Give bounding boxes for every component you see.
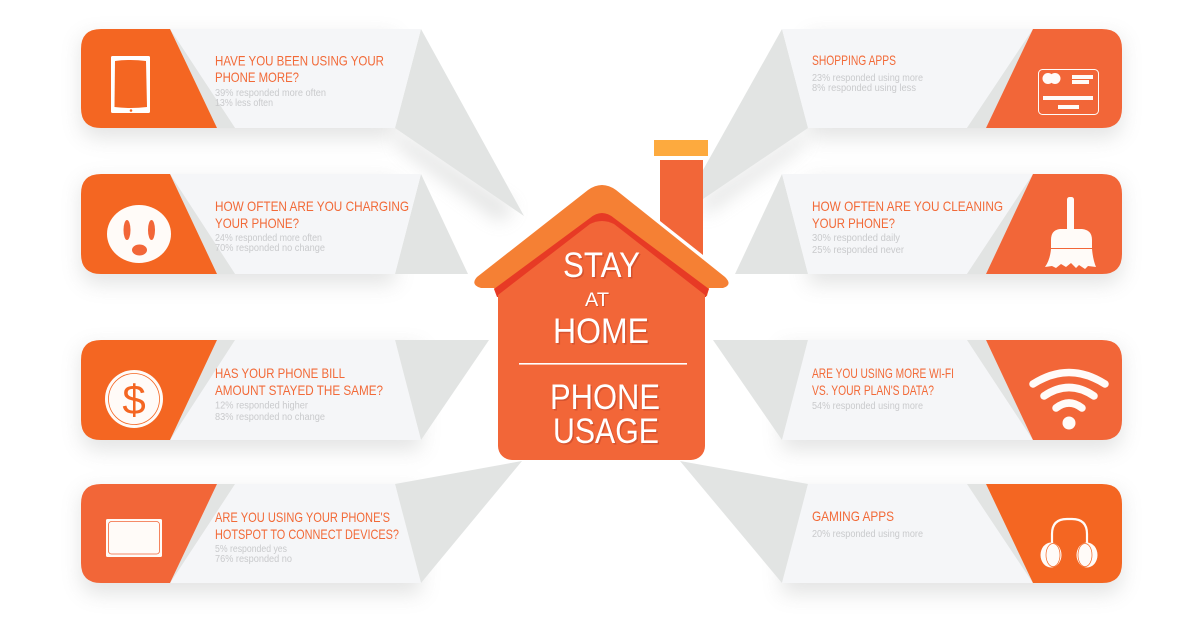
text: hotspot: 5% responded yes (215, 544, 287, 555)
text: using phone more: HAVE YOU BEEN USING YOUR (215, 52, 384, 68)
text: phone bill: 12% responded higher (215, 400, 309, 412)
house title: STAY (563, 246, 640, 285)
house title: PHONE (550, 378, 660, 417)
text: cleaning phone: HOW OFTEN ARE YOU CLEANING (812, 198, 1003, 214)
text: shopping apps: 23% responded using more (812, 73, 923, 84)
house title: HOME (553, 312, 649, 351)
text: gaming apps: 20% responded using more (812, 529, 923, 540)
text: shopping apps: 8% responded using less (812, 83, 916, 94)
text: cleaning phone: 30% responded daily (812, 233, 900, 244)
house (474, 140, 729, 460)
text: hotspot: 76% responded no (215, 554, 292, 565)
house title: USAGE (553, 412, 659, 451)
chimney (654, 140, 708, 255)
icon: wifi (1033, 372, 1105, 430)
icon: broom (1045, 197, 1096, 269)
text: cleaning phone: 25% responded never (812, 245, 905, 256)
text: wi-fi: ARE YOU USING MORE WI-FI (812, 365, 954, 381)
panel: hotspot (81, 461, 522, 583)
house title: STAY (564, 248, 642, 286)
text: charging phone: 24% responded more often (215, 233, 322, 244)
text: shopping apps (812, 52, 923, 94)
text: gaming apps (812, 508, 923, 540)
icon: power outlet (107, 205, 171, 263)
text: using phone more (215, 52, 384, 109)
house title: PHONE (552, 380, 662, 418)
icon: headphones (1040, 519, 1098, 568)
text: wi-fi (812, 365, 954, 412)
text: gaming apps: GAMING APPS (812, 508, 894, 524)
text: cleaning phone (812, 198, 1003, 256)
panel: charging phone (81, 174, 468, 274)
house title (519, 246, 687, 452)
panel: gaming apps (680, 461, 1122, 583)
text: phone bill (215, 365, 383, 423)
house title: USAGE (554, 414, 660, 452)
roof (474, 185, 729, 297)
panel: cleaning phone (735, 174, 1122, 274)
text: wi-fi: VS. YOUR PLAN'S DATA? (812, 382, 934, 398)
house title: HOME (554, 314, 650, 352)
panel: shopping apps (703, 29, 1122, 199)
text: wi-fi: 54% responded using more (812, 401, 923, 412)
text: hotspot: ARE YOU USING YOUR PHONE'S (215, 509, 390, 525)
card shadows (81, 36, 1122, 594)
text: phone bill: AMOUNT STAYED THE SAME? (215, 382, 383, 398)
panel: wi-fi (713, 340, 1122, 440)
panel: phone bill (81, 340, 489, 440)
text: charging phone (215, 198, 409, 254)
text: using phone more: PHONE MORE? (215, 69, 299, 85)
text: shopping apps: SHOPPING APPS (812, 52, 896, 68)
text: hotspot (215, 509, 399, 565)
icon: tablet (111, 56, 150, 113)
text: phone bill: HAS YOUR PHONE BILL (215, 365, 345, 381)
text: charging phone: HOW OFTEN ARE YOU CHARGING (215, 198, 409, 214)
house title: AT (585, 290, 609, 311)
house body (498, 221, 705, 460)
icon: dollar coin (105, 370, 163, 428)
house title: AT (586, 291, 610, 312)
text: using phone more: 39% responded more often (215, 88, 326, 99)
icon: credit card (1038, 70, 1098, 114)
icon: hotspot device (106, 519, 162, 557)
text: phone bill: 83% responded no change (215, 412, 325, 423)
text: using phone more: 13% less often (215, 98, 273, 109)
text: hotspot: HOTSPOT TO CONNECT DEVICES? (215, 526, 399, 542)
text: charging phone: YOUR PHONE? (215, 215, 299, 231)
panel: using phone more (81, 29, 524, 216)
text: charging phone: 70% responded no change (215, 243, 325, 254)
icon: dollar coin: $ (122, 376, 146, 423)
tail shadows (395, 128, 808, 222)
text: cleaning phone: YOUR PHONE? (812, 215, 895, 231)
